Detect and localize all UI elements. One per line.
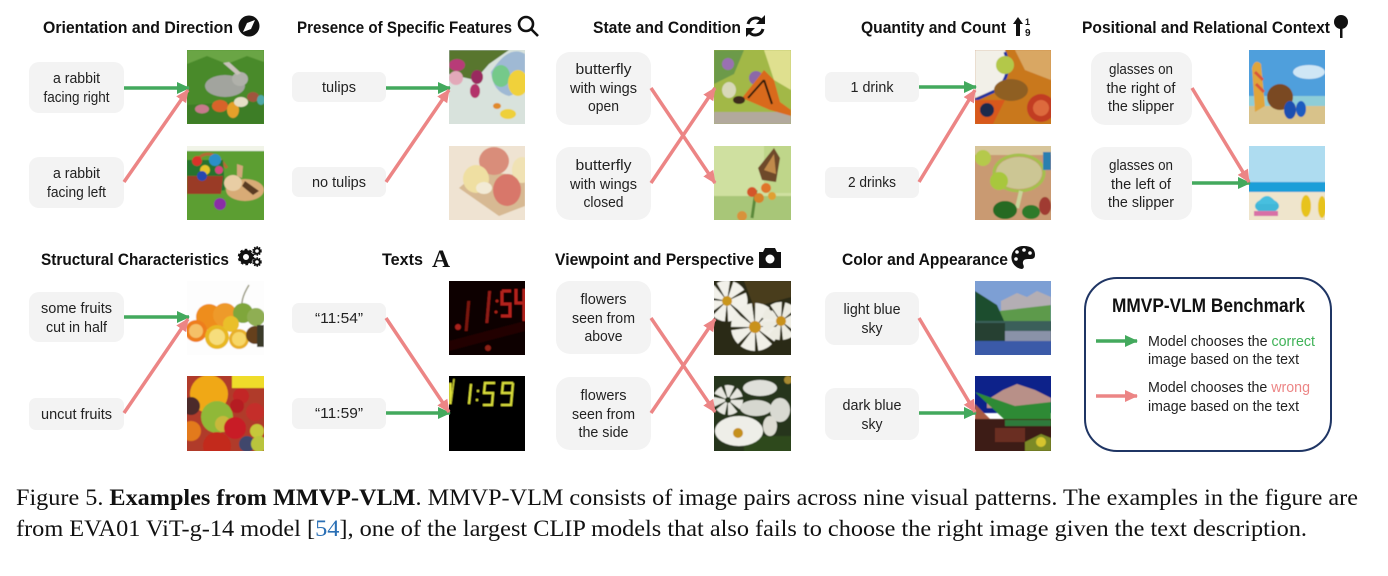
heading: state and condition: State and Condition bbox=[593, 18, 741, 37]
label: butterfly with wings open: butterfly bbox=[576, 61, 632, 78]
label: flowers seen from above bbox=[556, 281, 651, 354]
image: uncut fruits bbox=[187, 376, 264, 451]
label: 1 drink: 1 drink bbox=[850, 79, 894, 96]
legend text: correct: Model chooses the correct bbox=[1148, 333, 1316, 350]
icon: map pin bbox=[1334, 15, 1348, 38]
label: uncut fruits: uncut fruits bbox=[41, 406, 112, 423]
legend text: wrong: Model chooses the wrong bbox=[1148, 379, 1310, 396]
heading: orientation and direction: Orientation and Direction bbox=[43, 18, 233, 37]
label: flowers seen from above: seen from bbox=[572, 310, 635, 327]
label: butterfly with wings open bbox=[556, 52, 651, 125]
panel: presence of specific features bbox=[292, 17, 538, 223]
image: beach with coconut bbox=[1249, 50, 1325, 124]
image: yellow clock bbox=[449, 376, 525, 451]
caption: from EVA01 ViT-g-14 model [ 54], one of the largest CLIP models that also fails to choose the right image given the text description. bbox=[16, 516, 1307, 542]
label: a rabbit facing right bbox=[29, 62, 124, 113]
label: 1 drink bbox=[825, 72, 919, 102]
arrow: correct bbox=[386, 86, 450, 90]
label: uncut fruits bbox=[29, 398, 124, 430]
heading: presence of specific features: Presence of Specific Features bbox=[297, 18, 512, 37]
icon: sort numbers: 9 bbox=[1025, 28, 1031, 39]
label: 2 drinks: 2 drinks bbox=[848, 174, 896, 191]
panel: state and condition bbox=[556, 15, 794, 226]
heading: viewpoint and perspective: Viewpoint and Perspective bbox=[555, 250, 754, 269]
panel: viewpoint and perspective bbox=[555, 248, 794, 454]
label: glasses on the left of the slipper: the left of bbox=[1111, 176, 1172, 193]
panel: texts bbox=[292, 246, 528, 454]
label: butterfly with wings open: with wings bbox=[569, 80, 637, 97]
icon: sort numbers bbox=[1013, 17, 1031, 39]
label: some fruits cut in half: some fruits bbox=[41, 300, 112, 317]
caption: Figure 5. Examples from MMVP-VLM . MMVP-VLM consists of image pairs across nine visual patterns. The examples in the figure are bbox=[16, 485, 1358, 511]
label: 11:59: “11:59” bbox=[315, 405, 363, 422]
label: flowers seen from above: flowers bbox=[580, 291, 626, 308]
icon: compass bbox=[238, 16, 260, 36]
arrow: wrong bbox=[919, 318, 975, 412]
arrow: wrong, above to side image bbox=[651, 318, 715, 412]
label: light blue sky: light blue bbox=[844, 301, 900, 318]
icon: palette bbox=[1011, 246, 1035, 269]
arrow: wrong, closed to open image bbox=[651, 88, 715, 183]
arrow: wrong, side to above image bbox=[651, 319, 715, 413]
panel: positional and relational context bbox=[1082, 15, 1348, 223]
label: dark blue sky bbox=[825, 388, 919, 440]
icon: refresh bbox=[746, 15, 765, 37]
image: lake, dark blue sky bbox=[975, 376, 1051, 451]
arrow: wrong bbox=[124, 319, 188, 413]
label: flowers seen from the side bbox=[556, 377, 651, 450]
image: lake, light blue sky bbox=[975, 281, 1051, 355]
label: flowers seen from the side: seen from bbox=[572, 406, 635, 423]
image: daisies from the side bbox=[714, 376, 791, 451]
label: tulips bbox=[292, 72, 386, 102]
panel: orientation and direction bbox=[29, 16, 267, 223]
caption bbox=[16, 485, 1358, 542]
heading: positional and relational context: Positional and Relational Context bbox=[1082, 18, 1330, 37]
label: 11:54 bbox=[292, 303, 386, 333]
label: glasses on the right of the slipper: the slipper bbox=[1108, 98, 1174, 115]
arrow: correct bbox=[386, 411, 450, 415]
label: glasses on the left of the slipper bbox=[1091, 147, 1192, 220]
image: rabbit facing left bbox=[187, 146, 264, 220]
label: glasses on the right of the slipper: glasses on bbox=[1109, 61, 1173, 78]
arrow: wrong bbox=[386, 318, 449, 412]
label: dark blue sky: dark blue bbox=[842, 397, 902, 414]
label: 2 drinks bbox=[825, 167, 919, 198]
heading: quantity and count: Quantity and Count bbox=[861, 18, 1006, 37]
panel: legend, MMVP-VLM Benchmark bbox=[1085, 278, 1331, 451]
arrow: correct bbox=[124, 315, 189, 319]
label: light blue sky: sky bbox=[862, 320, 883, 337]
label: glasses on the left of the slipper: glasses on bbox=[1109, 157, 1173, 174]
label: butterfly with wings closed: butterfly bbox=[576, 157, 632, 174]
icon: gears bbox=[239, 247, 261, 266]
arrow: correct bbox=[1192, 181, 1250, 185]
legend text: wrong: image based on the text bbox=[1148, 398, 1300, 415]
legend arrow: correct bbox=[1096, 339, 1137, 343]
image: red clock bbox=[449, 281, 525, 355]
label: some fruits cut in half bbox=[29, 292, 124, 342]
arrow: correct bbox=[124, 86, 189, 90]
label: a rabbit facing left: a rabbit bbox=[53, 165, 101, 182]
image: daisies from above bbox=[714, 281, 791, 355]
label: butterfly with wings closed: with wings bbox=[569, 176, 637, 193]
icon: camera bbox=[759, 248, 781, 268]
panel: quantity and count bbox=[825, 17, 1055, 223]
icon: letter A: A bbox=[432, 246, 450, 273]
image: one drink bbox=[975, 50, 1051, 124]
heading: structural characteristics: Structural Characteristics bbox=[41, 250, 229, 269]
panel: structural characteristics bbox=[29, 247, 267, 460]
arrow: wrong, open to closed image bbox=[651, 88, 715, 183]
arrow: wrong bbox=[1192, 88, 1249, 182]
legend title: MMVP-VLM Benchmark bbox=[1112, 296, 1305, 317]
image: tulips bbox=[449, 50, 525, 124]
image: butterfly wings closed bbox=[714, 146, 791, 220]
label: dark blue sky: sky bbox=[862, 416, 883, 433]
arrow: wrong bbox=[919, 90, 975, 182]
label: flowers seen from the side: the side bbox=[578, 424, 628, 441]
icon: sort numbers: 1 bbox=[1025, 17, 1030, 27]
label: no tulips: no tulips bbox=[312, 174, 366, 191]
label: some fruits cut in half: cut in half bbox=[46, 319, 108, 336]
label: a rabbit facing left: facing left bbox=[47, 184, 107, 201]
label: no tulips bbox=[292, 167, 386, 197]
arrow: wrong bbox=[386, 90, 449, 182]
label: flowers seen from above: above bbox=[584, 328, 622, 345]
panel: color and appearance bbox=[825, 246, 1054, 454]
image: fruits some cut in half bbox=[187, 284, 264, 350]
arrow: correct bbox=[919, 85, 976, 89]
heading: texts: Texts bbox=[382, 250, 423, 269]
label: glasses on the right of the slipper: the right of bbox=[1106, 80, 1176, 97]
label: a rabbit facing right: a rabbit bbox=[53, 70, 101, 87]
image: two drinks bbox=[975, 146, 1051, 220]
label: light blue sky bbox=[825, 292, 919, 345]
legend text: correct: image based on the text bbox=[1148, 351, 1300, 368]
label: glasses on the left of the slipper: the slipper bbox=[1108, 194, 1174, 211]
legend text: wrong bbox=[1148, 379, 1310, 415]
image: rabbit facing right bbox=[187, 50, 264, 124]
legend arrow: wrong bbox=[1096, 394, 1137, 398]
icon: magnifier bbox=[519, 17, 538, 36]
label: 11:54: “11:54” bbox=[315, 310, 363, 327]
image: beach with hat bbox=[1249, 146, 1325, 220]
legend text: correct bbox=[1148, 333, 1316, 368]
label: butterfly with wings closed bbox=[556, 147, 651, 220]
label: glasses on the right of the slipper bbox=[1091, 52, 1192, 125]
label: tulips: tulips bbox=[322, 79, 356, 96]
image: butterfly wings open bbox=[714, 50, 791, 124]
arrow: correct bbox=[919, 411, 976, 415]
label: butterfly with wings open: open bbox=[588, 98, 619, 115]
label: 11:59 bbox=[292, 398, 386, 429]
arrow: wrong bbox=[124, 90, 188, 182]
image: eggs in carton bbox=[449, 146, 525, 220]
label: a rabbit facing right: facing right bbox=[44, 89, 110, 106]
label: flowers seen from the side: flowers bbox=[580, 387, 626, 404]
heading: color and appearance: Color and Appearance bbox=[842, 250, 1008, 269]
legend box bbox=[1085, 278, 1331, 451]
label: a rabbit facing left bbox=[29, 157, 124, 208]
label: butterfly with wings closed: closed bbox=[584, 194, 624, 211]
